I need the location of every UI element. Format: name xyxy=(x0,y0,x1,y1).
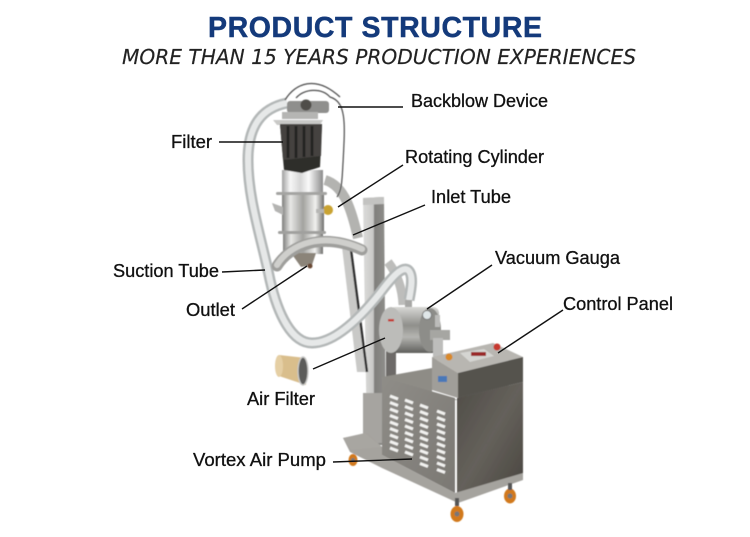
vortex drum with gauge xyxy=(379,300,450,360)
suction tube xyxy=(248,103,412,343)
inlet tube xyxy=(277,241,362,266)
suction tube highlight xyxy=(248,103,412,343)
subtitle: MORE THAN 15 YEARS PRODUCTION EXPERIENCES xyxy=(122,45,636,69)
callout: vortex air pump: Vortex Air Pump xyxy=(193,450,326,470)
callout: filter: Filter xyxy=(171,132,212,152)
callout: air filter xyxy=(247,338,385,409)
control box xyxy=(432,343,523,398)
callout: outlet: Outlet xyxy=(186,300,235,320)
brass valve xyxy=(323,205,333,215)
callout: rotating cylinder: Rotating Cylinder xyxy=(405,147,544,167)
callout: vortex air pump xyxy=(193,450,412,470)
callout: control panel: Control Panel xyxy=(563,294,673,314)
backblow device xyxy=(282,83,344,197)
callout: vacuum gauge: Vacuum Gauga xyxy=(495,248,621,268)
casters xyxy=(348,454,516,522)
air filter cartridge xyxy=(275,355,308,385)
callout: inlet tube: Inlet Tube xyxy=(431,187,511,207)
callout: filter xyxy=(171,132,283,152)
machine illustration xyxy=(248,83,523,522)
callout: inlet tube xyxy=(353,187,511,235)
inlet tube highlight xyxy=(277,240,362,265)
upright mast and bracket xyxy=(327,197,403,445)
filter body xyxy=(272,120,333,268)
title: PRODUCT STRUCTURE xyxy=(208,12,542,44)
rear tube xyxy=(325,180,358,238)
callout: control panel xyxy=(498,294,673,353)
callout: outlet xyxy=(186,266,307,320)
callout: suction tube: Suction Tube xyxy=(113,261,219,281)
callout: rotating cylinder xyxy=(338,147,544,207)
pump cabinet xyxy=(343,368,523,503)
callout: backblow device: Backblow Device xyxy=(411,91,548,111)
callout: air filter: Air Filter xyxy=(247,389,315,409)
callout: vacuum gauge xyxy=(427,248,621,309)
